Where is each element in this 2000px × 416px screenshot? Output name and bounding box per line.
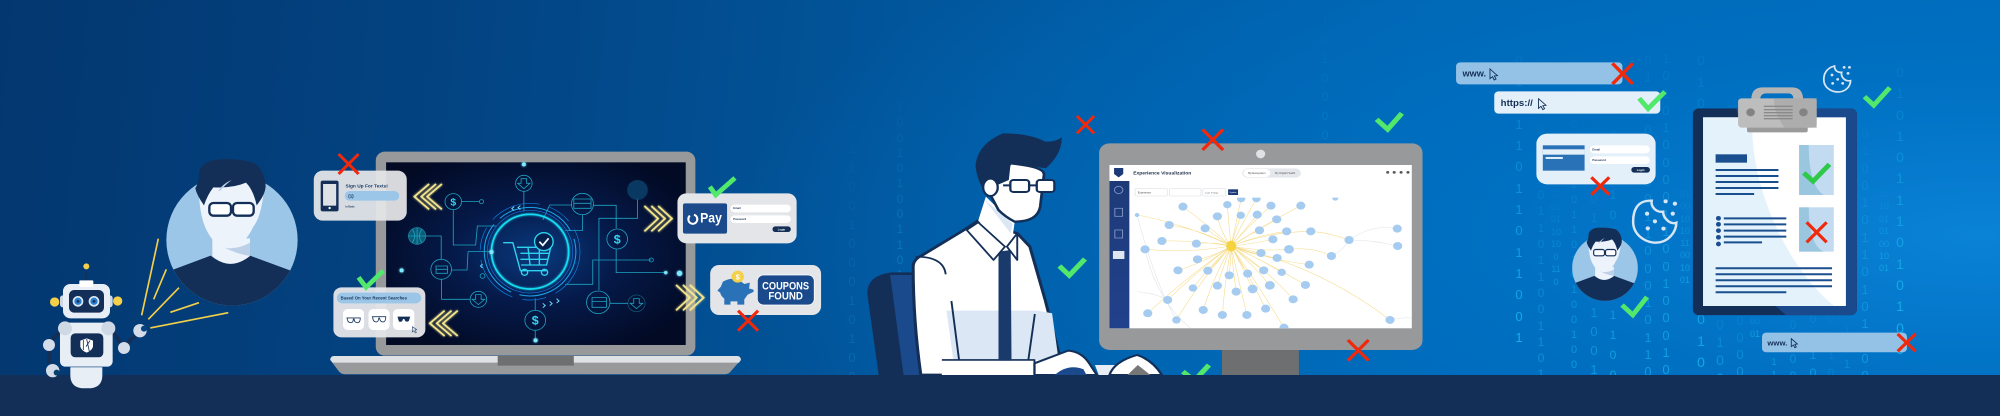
laptop body	[330, 152, 741, 374]
experience visualization dashboard header: Experience	[1138, 192, 1152, 195]
robot head	[50, 263, 122, 318]
binary code rain: 00100011001	[1590, 172, 1598, 377]
login card	[1536, 134, 1656, 195]
experience visualization dashboard header: My Digital Health	[1275, 172, 1296, 175]
screen dollar signs: $	[532, 314, 539, 328]
login card: Email	[1592, 147, 1600, 151]
scan beams	[142, 239, 228, 328]
monitor	[1099, 143, 1423, 350]
popup: pay login: Pay	[700, 210, 722, 226]
popup: coupons found: FOUND	[768, 290, 803, 302]
url bar: https	[1494, 91, 1665, 114]
popup: coupons found: COUPONS	[762, 280, 809, 292]
robot arms	[49, 330, 140, 363]
marks: x and check on laptop popups	[339, 154, 758, 331]
icon: large cookie	[1633, 199, 1677, 243]
experience visualization dashboard header: Last 7 Days	[1205, 191, 1219, 194]
shopping cart ring	[476, 203, 580, 308]
screen dollar signs	[450, 197, 621, 328]
binary code rain: 10100101001001	[1879, 189, 1889, 273]
binary code rain	[849, 56, 1904, 375]
binary code rain: 00100	[1790, 301, 1796, 383]
laptop with e-commerce circuit	[314, 152, 821, 374]
desk worker and monitor	[867, 113, 1423, 381]
footer band	[0, 375, 2000, 416]
avatar: small user	[1571, 228, 1639, 303]
url bar: www	[1456, 62, 1633, 84]
binary code rain: 01010111010100	[1896, 64, 1904, 357]
popup: pay login: Login	[778, 227, 786, 231]
binary code rain: 1001010011010	[897, 100, 903, 298]
binary code rain: 10010110100110	[1551, 189, 1561, 286]
robot hands and joints	[43, 324, 147, 377]
binary code rain: 01100	[1810, 312, 1816, 398]
binary code rain: 01001011010100100	[1571, 119, 1577, 371]
url bar: www: www.	[1462, 69, 1486, 80]
screen circuit diagram	[408, 175, 665, 340]
popup: coupons found	[710, 265, 821, 315]
worker figure	[913, 133, 1162, 375]
popup: recent searches: Based On Your Recent Searches	[341, 296, 408, 301]
check near small cookie	[1864, 88, 1890, 105]
check near avatar	[1622, 297, 1647, 315]
network graph	[1135, 195, 1412, 332]
binary code rain: 01100100010100	[848, 122, 856, 384]
robot with scanning beams	[43, 239, 228, 388]
clipboard clip	[1738, 87, 1817, 132]
url bar: https: https://	[1501, 98, 1533, 109]
url bar: bottom www	[1762, 333, 1916, 352]
graph nodes	[1135, 195, 1402, 332]
binary code rain: 0100101101010001	[1861, 126, 1869, 400]
clipboard	[1693, 87, 1857, 315]
screen dollar signs: $	[614, 233, 621, 246]
chair	[867, 272, 923, 375]
approved checkbox	[1799, 145, 1834, 195]
binary code rain: 00001	[1736, 313, 1744, 396]
login card: Login	[1637, 168, 1645, 172]
popup: sign up for texts: In Deals	[345, 205, 355, 208]
robot base	[70, 367, 102, 388]
popup: coupons found: $	[736, 272, 741, 281]
url bar: bottom www: www.	[1766, 339, 1787, 347]
binary code rain: 00010110110011010	[1538, 123, 1544, 398]
graph center node	[1226, 241, 1236, 251]
glowing data dots	[400, 162, 682, 342]
binary code rain: 1011	[1844, 323, 1850, 388]
binary code rain: 0100101011001001	[1680, 189, 1690, 285]
popup: sign up for texts: (1)	[348, 193, 354, 198]
binary code rain: 0100100100100100	[1697, 52, 1705, 392]
popup: sign up for texts: Sign Up For Texts!	[345, 184, 388, 190]
monitor stand	[1222, 349, 1299, 376]
rejected checkbox	[1799, 207, 1834, 252]
icon: small cookie	[1824, 66, 1851, 92]
experience visualization dashboard header: My Ecosystem	[1248, 172, 1265, 175]
binary code rain: 10100001	[1322, 14, 1328, 161]
binary code rain: 0100	[1716, 316, 1724, 386]
popup: recent searches	[333, 287, 425, 337]
login card: Password	[1592, 158, 1606, 162]
marks: x and check around monitor	[1059, 113, 1402, 381]
screen dollar signs: $	[450, 197, 456, 208]
binary code rain: 00100	[1828, 312, 1834, 398]
binary code rain: 01000110011000101101	[1644, 53, 1652, 397]
experience visualization dashboard header: Update	[1230, 191, 1236, 194]
experience visualization dashboard header: Experience Visualization	[1133, 171, 1192, 175]
popup: pay login: Email	[733, 206, 741, 210]
popup: pay login: Password	[733, 217, 747, 221]
popup: pay login	[677, 193, 797, 243]
binary code rain: 0001001101100	[1610, 128, 1616, 382]
right side: web security items and clipboard	[1456, 62, 1916, 352]
binary code rain: 10101000011001000101	[1662, 51, 1670, 395]
avatar: large user	[163, 159, 300, 310]
experience visualization dashboard header	[1109, 168, 1410, 328]
popup: sign up for texts	[314, 171, 407, 221]
robot torso	[58, 321, 115, 367]
binary code rain: 0001	[1750, 316, 1760, 339]
binary code rain: 01011011011001	[1515, 53, 1523, 345]
arrows: neon chevrons	[414, 184, 704, 336]
binary code rain: 1011	[1771, 331, 1777, 381]
document lines	[1716, 154, 1832, 292]
